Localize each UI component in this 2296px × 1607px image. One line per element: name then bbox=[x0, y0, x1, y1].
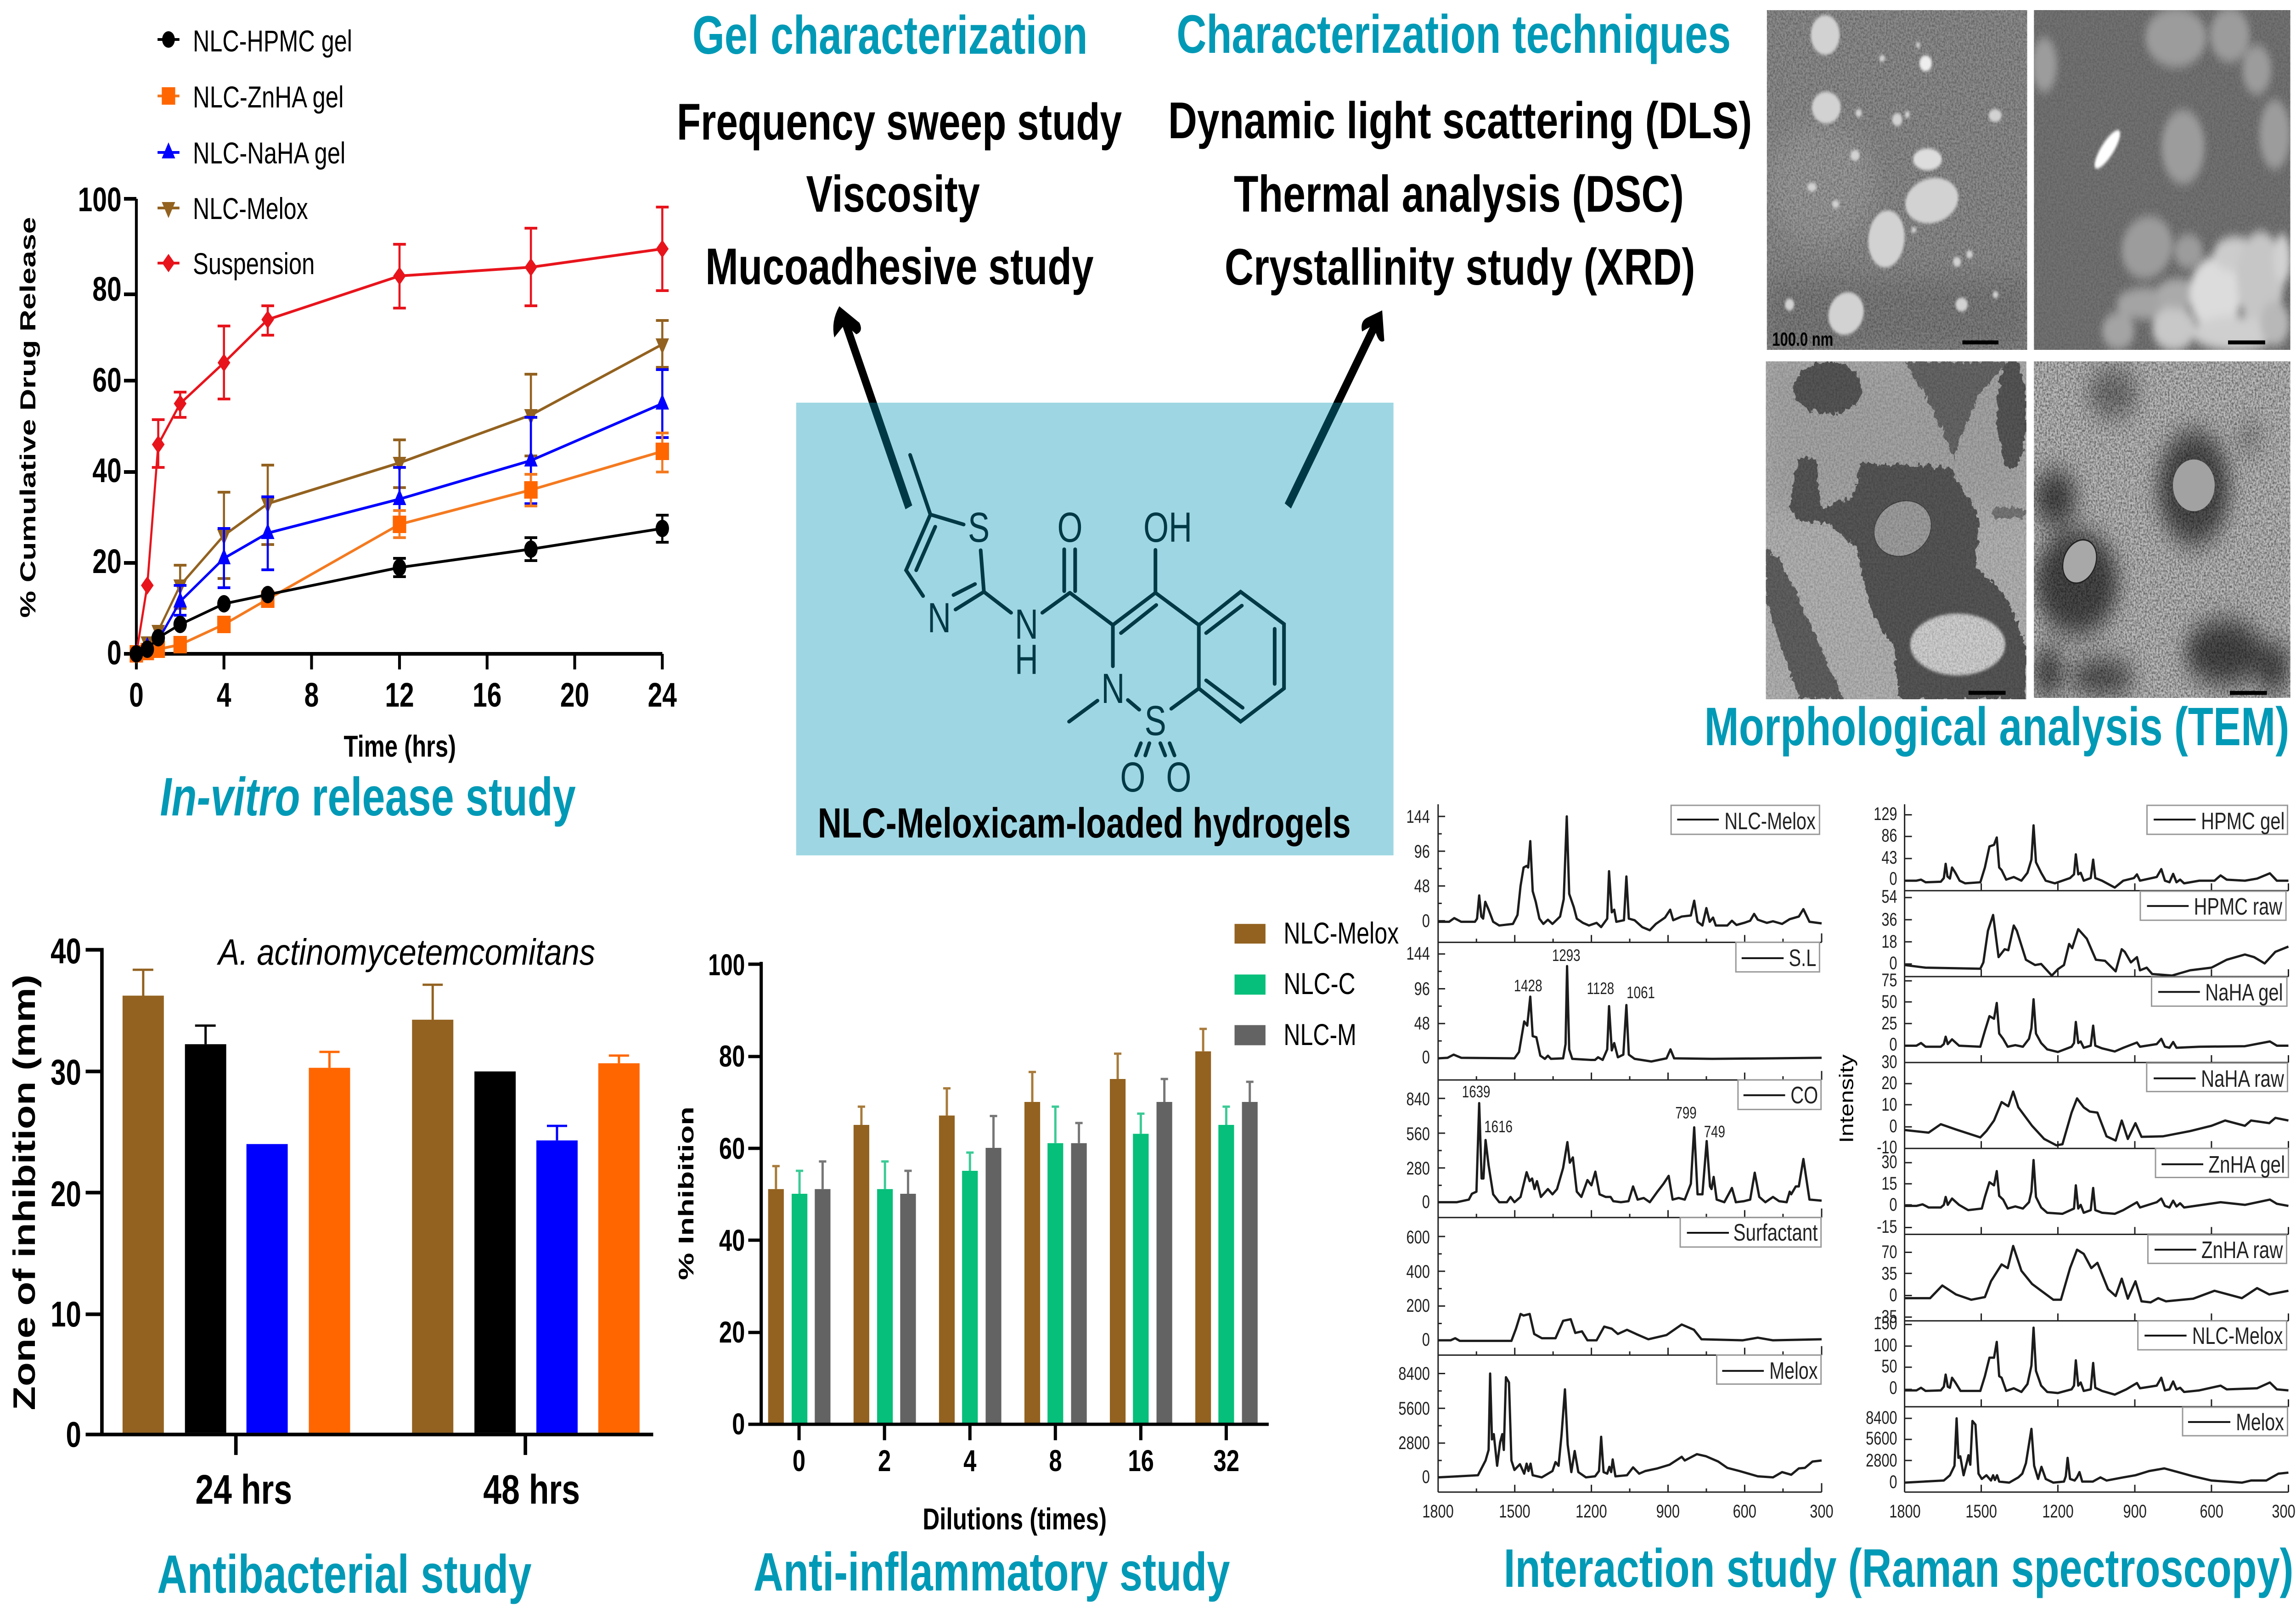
y-axis tick labels: 35 bbox=[1881, 1263, 1897, 1284]
series: NLC-ZnHA gel bbox=[136, 433, 669, 654]
peak annotations: 749 bbox=[1704, 1122, 1725, 1141]
y-axis tick labels: 0 bbox=[1889, 1194, 1897, 1215]
x-axis tick labels: 32 bbox=[1214, 1444, 1239, 1478]
y-axis tick labels: 50 bbox=[1881, 1356, 1897, 1377]
text block: characterization techniques list: Thermal analysis (DSC) bbox=[1234, 166, 1684, 223]
heading: characterization techniques: Characterization techniques bbox=[1176, 5, 1731, 65]
legend labels: NaHA raw bbox=[2201, 1065, 2284, 1092]
x-axis tick labels: 1500 bbox=[1965, 1501, 1997, 1522]
peak annotations: 1293 bbox=[1552, 946, 1581, 965]
peak annotations: 799 bbox=[1675, 1103, 1697, 1122]
chart legend labels: NLC-C bbox=[1283, 967, 1356, 1001]
y-axis title: Zone of inhibition (mm) bbox=[7, 974, 42, 1410]
y-axis tick labels: 0 bbox=[1889, 1116, 1897, 1136]
y-axis tick labels: 129 bbox=[1874, 804, 1897, 824]
y-axis tick labels bbox=[78, 180, 122, 672]
y-axis tick labels: 5600 bbox=[1866, 1428, 1897, 1449]
y-axis tick labels: 18 bbox=[1881, 931, 1897, 952]
molecule atom labels: H bbox=[1015, 636, 1038, 683]
y-axis tick labels: 40 bbox=[92, 451, 122, 489]
peak annotations: 1061 bbox=[1626, 983, 1655, 1002]
peak annotations: 1128 bbox=[1587, 979, 1614, 998]
chart legend: NLC-ZnHA gel bbox=[193, 81, 343, 114]
y-axis tick labels: 0 bbox=[66, 1414, 81, 1455]
y-axis tick labels: 25 bbox=[1881, 1013, 1897, 1034]
y-axis tick labels: 70 bbox=[1881, 1242, 1897, 1262]
chart legend labels: NLC-Melox bbox=[1283, 917, 1399, 950]
y-axis tick labels: 144 bbox=[1407, 943, 1430, 964]
x-axis tick labels: 1800 bbox=[1889, 1501, 1921, 1522]
y-axis tick labels: 8400 bbox=[1398, 1363, 1430, 1384]
y-axis tick labels: -35 bbox=[1877, 1306, 1897, 1327]
x-axis tick labels: 2 bbox=[878, 1444, 891, 1478]
legend labels: ZnHA raw bbox=[2201, 1236, 2283, 1263]
y-axis tick labels: 0 bbox=[1422, 910, 1430, 931]
molecule atom labels: N bbox=[1101, 665, 1125, 712]
y-axis tick labels: -10 bbox=[1877, 1137, 1897, 1157]
y-axis tick labels: 20 bbox=[719, 1316, 745, 1349]
heading: interaction study: Interaction study (Raman spectroscopy) bbox=[1504, 1539, 2294, 1599]
series: NLC-Melox bbox=[136, 320, 669, 654]
arrow: to characterization techniques bbox=[1288, 310, 1384, 506]
text block: characterization techniques list: Crystallinity study (XRD) bbox=[1225, 239, 1695, 296]
text block: characterization techniques list bbox=[1168, 92, 1752, 296]
legend labels: Melox bbox=[2236, 1409, 2284, 1435]
legend labels: S.L bbox=[1789, 944, 1816, 971]
arrow: to gel characterization bbox=[833, 306, 909, 507]
x-axis tick labels: 12 bbox=[385, 676, 414, 714]
legend labels bbox=[2192, 808, 2285, 1435]
molecule atom labels bbox=[928, 504, 1192, 801]
panel title: NLC-Meloxicam-loaded hydrogels: NLC-Meloxicam-loaded hydrogels bbox=[818, 800, 1351, 847]
molecule atom labels: O bbox=[1120, 754, 1145, 801]
panel: antibacterial bar chart bbox=[7, 931, 653, 1513]
y-axis tick labels bbox=[708, 949, 745, 1441]
panel: anti-inflammatory bar chart bbox=[675, 917, 1399, 1536]
y-axis tick labels bbox=[1398, 806, 1430, 1487]
bars and axes bbox=[86, 948, 653, 1455]
y-axis tick labels: 40 bbox=[51, 931, 81, 971]
molecule: meloxicam structure bbox=[906, 455, 1284, 801]
x-axis tick labels: 16 bbox=[473, 676, 501, 714]
chart legend labels: NLC-M bbox=[1283, 1018, 1356, 1052]
y-axis tick labels: 400 bbox=[1407, 1261, 1430, 1282]
x-axis labels: 24 hrs bbox=[195, 1467, 292, 1513]
molecule atom labels: O bbox=[1057, 504, 1083, 551]
y-axis tick labels: 30 bbox=[51, 1052, 81, 1092]
y-axis tick labels: 100 bbox=[708, 949, 745, 982]
y-axis tick labels: 20 bbox=[92, 542, 122, 580]
legend labels: Surfactant bbox=[1733, 1219, 1818, 1246]
molecule atom labels: OH bbox=[1143, 504, 1192, 551]
x-axis labels bbox=[195, 1467, 580, 1513]
peak annotations: 1616 bbox=[1484, 1117, 1513, 1136]
y-axis tick labels: 560 bbox=[1407, 1124, 1430, 1144]
x-axis tick labels: 1200 bbox=[2042, 1501, 2074, 1522]
bars and axes bbox=[748, 924, 1269, 1440]
x-axis tick labels: 16 bbox=[1128, 1444, 1154, 1478]
x-axis tick labels: 1500 bbox=[1499, 1501, 1531, 1522]
y-axis tick labels: 60 bbox=[719, 1132, 745, 1166]
legend labels: ZnHA gel bbox=[2208, 1151, 2285, 1178]
y-axis tick labels: 20 bbox=[1881, 1073, 1897, 1093]
molecule atom labels: O bbox=[1166, 754, 1191, 801]
y-axis tick labels bbox=[51, 931, 81, 1455]
peak annotations: 1639 bbox=[1462, 1082, 1490, 1101]
y-axis tick labels: 75 bbox=[1881, 970, 1897, 990]
x-axis tick labels: 8 bbox=[304, 676, 319, 714]
TEM image C bbox=[1766, 358, 2026, 699]
y-axis tick labels: -15 bbox=[1877, 1216, 1897, 1237]
peak annotations: 1428 bbox=[1514, 976, 1542, 995]
y-axis tick labels: 0 bbox=[732, 1408, 745, 1441]
chart axes and ticks bbox=[124, 199, 662, 669]
x-axis tick labels: 600 bbox=[1733, 1501, 1756, 1522]
y-axis tick labels: 50 bbox=[1881, 991, 1897, 1012]
y-axis tick labels: 5600 bbox=[1398, 1398, 1430, 1419]
y-axis tick labels: 0 bbox=[107, 634, 122, 672]
x-axis tick labels bbox=[793, 1444, 1239, 1478]
y-axis tick labels: 0 bbox=[1422, 1329, 1430, 1350]
molecule bonds bbox=[906, 455, 1284, 755]
x-axis tick labels: 24 bbox=[648, 676, 677, 714]
TEM image A bbox=[1767, 10, 2027, 350]
x-axis tick labels: 4 bbox=[963, 1444, 977, 1478]
TEM scale label: 100.0 nm bbox=[1772, 328, 1833, 350]
text block: characterization techniques list: Dynamic light scattering (DLS) bbox=[1168, 92, 1752, 150]
chart legend: Suspension bbox=[193, 247, 315, 281]
legend labels: NLC-Melox bbox=[1724, 808, 1816, 834]
legend labels bbox=[1724, 808, 1818, 1384]
chart legend bbox=[158, 25, 352, 281]
chart legend: NLC-HPMC gel bbox=[193, 25, 352, 58]
y-axis tick labels: 30 bbox=[1881, 1152, 1897, 1172]
heading: anti-inflammatory study: Anti-inflammatory study bbox=[754, 1542, 1230, 1602]
panel: Raman spectra left stack bbox=[1398, 804, 1834, 1522]
y-axis tick labels: 100 bbox=[78, 180, 122, 219]
chart legend: NLC-NaHA gel bbox=[193, 137, 345, 170]
y-axis tick labels: 60 bbox=[92, 361, 122, 399]
y-axis tick labels: 280 bbox=[1407, 1158, 1430, 1179]
y-axis tick labels: 144 bbox=[1407, 806, 1430, 827]
x-axis labels: 48 hrs bbox=[483, 1467, 580, 1513]
panel: in-vitro release study chart bbox=[16, 25, 677, 764]
species label: A. actinomycetemcomitans bbox=[217, 932, 595, 973]
text block: gel characterization list: Mucoadhesive study bbox=[705, 238, 1094, 296]
y-axis tick labels: 600 bbox=[1407, 1227, 1430, 1247]
y-axis title: intensity: Intensity bbox=[1835, 1054, 1857, 1143]
molecule atom labels: N bbox=[928, 595, 951, 641]
x-axis tick labels: 1800 bbox=[1422, 1501, 1454, 1522]
x-axis tick labels bbox=[1889, 1501, 2296, 1522]
y-axis tick labels: 200 bbox=[1407, 1295, 1430, 1316]
y-axis tick labels: 86 bbox=[1881, 825, 1897, 846]
y-axis tick labels: 0 bbox=[1889, 1377, 1897, 1398]
legend labels: NLC-Melox bbox=[2192, 1322, 2283, 1349]
legend labels: CO bbox=[1790, 1082, 1818, 1108]
x-axis title: Time (hrs) bbox=[343, 730, 456, 764]
y-axis tick labels: 0 bbox=[1889, 1285, 1897, 1305]
x-axis tick labels: 300 bbox=[2272, 1501, 2296, 1522]
y-axis tick labels: 8400 bbox=[1866, 1407, 1897, 1428]
y-axis tick labels: 0 bbox=[1889, 868, 1897, 889]
series: suspension bbox=[136, 207, 669, 654]
y-axis tick labels: 48 bbox=[1414, 876, 1430, 896]
spectra, axes and legend frames bbox=[1438, 804, 1822, 1492]
y-axis tick labels: 2800 bbox=[1866, 1450, 1897, 1471]
x-axis tick labels: 1200 bbox=[1576, 1501, 1607, 1522]
x-axis tick labels bbox=[129, 676, 677, 714]
x-axis tick labels: 8 bbox=[1049, 1444, 1062, 1478]
molecule atom labels: S bbox=[1145, 697, 1166, 744]
x-axis tick labels: 900 bbox=[2123, 1501, 2147, 1522]
x-axis tick labels bbox=[1422, 1501, 1834, 1522]
x-axis tick labels: 4 bbox=[217, 676, 231, 714]
y-axis tick labels: 0 bbox=[1889, 1034, 1897, 1055]
series: NLC-NaHA gel bbox=[136, 370, 669, 654]
y-axis tick labels: 0 bbox=[1889, 953, 1897, 973]
y-axis tick labels: 40 bbox=[719, 1224, 745, 1258]
y-axis tick labels: 96 bbox=[1414, 841, 1430, 862]
panel: Raman spectra right stack bbox=[1835, 804, 2296, 1522]
spectra, axes and legend frames bbox=[1905, 804, 2288, 1492]
y-axis tick labels: 54 bbox=[1881, 886, 1897, 907]
y-axis tick labels: 30 bbox=[1881, 1051, 1897, 1072]
y-axis tick labels: 0 bbox=[1422, 1047, 1430, 1068]
legend labels: NaHA gel bbox=[2205, 979, 2283, 1006]
legend labels: Melox bbox=[1769, 1357, 1818, 1384]
y-axis tick labels: 840 bbox=[1407, 1089, 1430, 1109]
y-axis tick labels: 96 bbox=[1414, 978, 1430, 999]
chart legend: NLC-Melox bbox=[193, 192, 308, 226]
y-axis tick labels: 10 bbox=[51, 1294, 81, 1334]
legend labels: HPMC raw bbox=[2194, 893, 2282, 920]
x-axis tick labels: 300 bbox=[1810, 1501, 1834, 1522]
y-axis tick labels: 20 bbox=[51, 1174, 81, 1214]
text block: gel characterization list bbox=[677, 94, 1122, 296]
panel: central tinted box bbox=[796, 403, 1394, 855]
x-axis tick labels: 20 bbox=[560, 676, 589, 714]
molecule atom labels: N bbox=[1015, 601, 1038, 648]
heading: in-vitro release study: In-vitro release study bbox=[160, 767, 576, 827]
y-axis tick labels: 0 bbox=[1422, 1191, 1430, 1212]
y-axis tick labels: 2800 bbox=[1398, 1433, 1430, 1453]
y-axis tick labels: 150 bbox=[1874, 1313, 1897, 1333]
x-axis tick labels: 900 bbox=[1656, 1501, 1680, 1522]
text block: gel characterization list: Frequency sweep study bbox=[677, 94, 1122, 151]
panel: TEM micrographs bbox=[1766, 8, 2290, 699]
series: NLC-HPMC gel bbox=[136, 515, 669, 654]
y-axis tick labels: 80 bbox=[92, 270, 122, 308]
heading: antibacterial study: Antibacterial study bbox=[157, 1545, 532, 1605]
peak annotations bbox=[1462, 946, 1725, 1141]
y-axis tick labels: 80 bbox=[719, 1040, 745, 1073]
text block: gel characterization list: Viscosity bbox=[806, 166, 980, 223]
y-axis tick labels: 100 bbox=[1874, 1335, 1897, 1355]
y-axis tick labels: 0 bbox=[1889, 1472, 1897, 1492]
x-axis tick labels: 0 bbox=[793, 1444, 805, 1478]
y-axis title: % Inhibition bbox=[675, 1107, 698, 1280]
heading: gel characterization: Gel characterization bbox=[692, 6, 1087, 66]
chart legend labels bbox=[1283, 917, 1399, 1052]
TEM image B bbox=[2032, 8, 2290, 351]
molecule atom labels: S bbox=[968, 504, 990, 551]
y-axis tick labels: 36 bbox=[1881, 909, 1897, 930]
heading: morphological analysis (TEM): Morphological analysis (TEM) bbox=[1705, 697, 2289, 757]
y-axis tick labels: 15 bbox=[1881, 1173, 1897, 1194]
y-axis tick labels: 48 bbox=[1414, 1013, 1430, 1034]
y-axis tick labels: 43 bbox=[1881, 847, 1897, 868]
y-axis tick labels: 0 bbox=[1422, 1467, 1430, 1487]
y-axis title: % Cumulative Drug Release bbox=[16, 217, 40, 618]
x-axis tick labels: 0 bbox=[129, 676, 144, 714]
legend labels: HPMC gel bbox=[2201, 808, 2285, 834]
x-axis tick labels: 600 bbox=[2200, 1501, 2223, 1522]
y-axis tick labels: 10 bbox=[1881, 1094, 1897, 1115]
y-axis tick labels bbox=[1866, 804, 1897, 1492]
TEM image D bbox=[2034, 361, 2290, 698]
x-axis title: Dilutions (times) bbox=[923, 1503, 1107, 1536]
